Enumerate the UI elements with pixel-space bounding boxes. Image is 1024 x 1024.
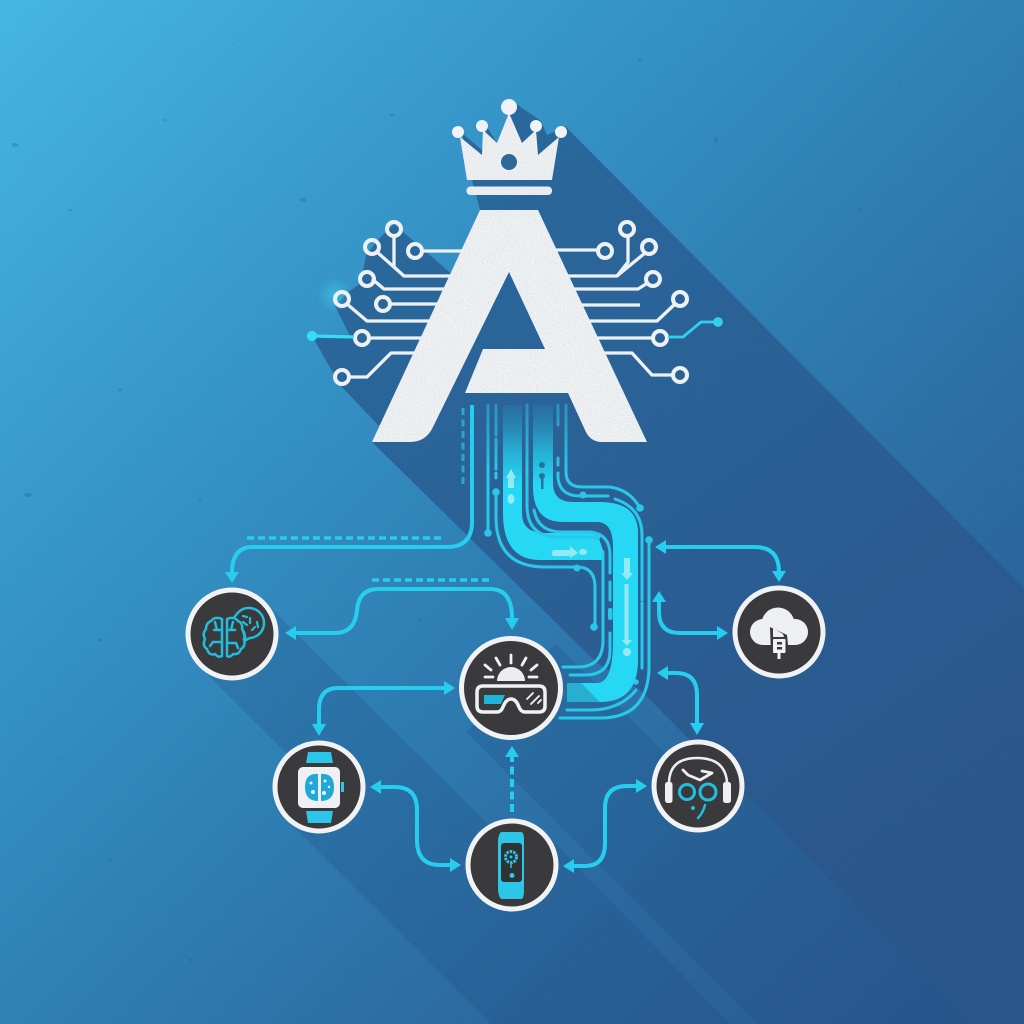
main shadow of crown and letter xyxy=(372,103,1024,1024)
node: brain xyxy=(188,590,276,678)
connector: band to glasses, dashed xyxy=(505,746,519,812)
icon: band with gear xyxy=(498,832,524,899)
dark flow markers xyxy=(539,462,545,489)
connector: glasses to brain xyxy=(285,580,519,640)
icon: two brains xyxy=(204,608,264,657)
shaded end of pipe xyxy=(567,683,600,702)
cyan trace right xyxy=(668,318,722,337)
crown band xyxy=(466,186,552,195)
crown jewel xyxy=(501,154,517,170)
connector: trunk to cloud, top xyxy=(655,540,786,582)
cyan trace left xyxy=(308,332,354,340)
dashed vertical trace xyxy=(462,408,464,488)
data pipes: flowing S-shaped channels xyxy=(484,405,653,718)
shadows of lower nodes xyxy=(200,602,1001,1024)
icon: cloud with tower xyxy=(750,608,808,659)
thin circuit traces xyxy=(488,405,649,718)
icon: watch with brain xyxy=(298,752,344,823)
shadow of left circuit xyxy=(312,224,470,425)
long shadows xyxy=(200,103,1024,1024)
pipe flow markers xyxy=(506,469,633,656)
node: cloud xyxy=(735,588,823,676)
node: smart glasses xyxy=(462,638,560,738)
letter A xyxy=(372,210,647,442)
connector: trunk to cloud, lower xyxy=(652,591,728,640)
node: headset xyxy=(654,742,742,830)
connector: band to headset xyxy=(563,779,647,873)
circuit traces: right side of A xyxy=(556,222,722,382)
icon: headset with glasses xyxy=(665,758,731,818)
pipe: left thick channel xyxy=(503,405,603,560)
cyan glow xyxy=(317,277,353,313)
trace end dots xyxy=(484,488,653,685)
circuit traces: left side of A xyxy=(308,222,463,384)
connector: trunk to brain node xyxy=(225,405,472,583)
node: fitness band xyxy=(468,821,556,909)
connector: trunk to headset xyxy=(657,666,704,735)
pipe: right thick channel xyxy=(533,405,638,702)
connector: watch to band xyxy=(370,780,461,872)
node: smartwatch xyxy=(275,743,363,831)
crown xyxy=(450,99,570,200)
icon: sun and goggles xyxy=(477,655,545,712)
connector: glasses to watch xyxy=(312,681,455,736)
